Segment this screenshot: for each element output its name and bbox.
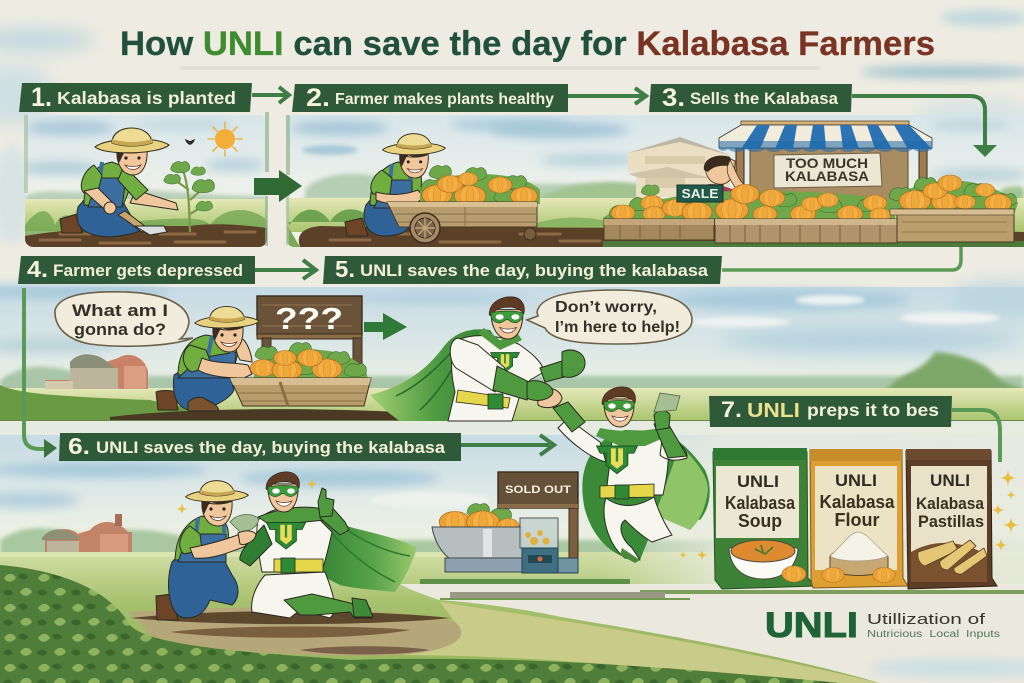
panel: step 6 scene: [0, 421, 1024, 683]
arrow: 7 to bags: [952, 410, 1000, 462]
pumpkin piles: [603, 175, 1018, 222]
juicing machine and sold out sign: [432, 472, 578, 573]
sale sign: [677, 185, 723, 202]
speech bubble: don't worry: [527, 290, 692, 344]
arrow: towards hero: [364, 313, 407, 340]
label 4: 4.: [27, 256, 48, 282]
title: How UNLI can save the day for Kalabasa Farmers: [120, 25, 935, 63]
panel: step 4 and 5 scene: [0, 282, 1024, 422]
product bag: pastillas: [906, 449, 997, 589]
flow arrows: [24, 87, 1000, 462]
crates: [604, 209, 1014, 243]
road and lower right fields: [400, 579, 1024, 683]
product bag: flour: Flour: [834, 510, 880, 530]
speech bubble: what am I gonna do: [55, 292, 193, 346]
crate of pumpkins: [230, 343, 371, 406]
speech bubble: what am I gonna do: What am I: [72, 301, 168, 320]
label 2: [292, 84, 568, 112]
background clouds top: [0, 10, 1024, 318]
label 5: [323, 256, 722, 284]
label 4: [18, 256, 255, 284]
sign: too much kalabasa: [774, 153, 882, 188]
logo: UNLI wordmark: Utillization of: [867, 611, 986, 628]
label 1: Kalabasa is planted: [57, 88, 236, 108]
label 1: 1.: [31, 82, 52, 112]
speech bubble: don't worry: I’m here to help!: [555, 319, 680, 336]
arrow: 2 to 3: [568, 88, 646, 104]
icon: bird: [185, 139, 195, 145]
product bag: soup: [713, 448, 815, 589]
label 2: Farmer makes plants healthy: [335, 91, 554, 108]
label 7: [709, 396, 952, 427]
building behind stall: [628, 137, 730, 197]
logo: UNLI wordmark: Nutricious Local Inputs: [867, 629, 1000, 640]
hero flying with clasp: [537, 387, 710, 563]
logo: UNLI wordmark: UNLI: [765, 606, 858, 645]
hero kneeling: [230, 472, 417, 618]
label 3: Sells the Kalabasa: [690, 89, 839, 108]
sparkles by bags: [679, 470, 1019, 561]
arrow: 3 to 4: [852, 96, 997, 157]
sparkles near farmer: [176, 478, 318, 515]
panel: step 2 and 3 scene: [287, 115, 1024, 247]
label 4: Farmer gets depressed: [53, 262, 243, 280]
farmhouse: [42, 514, 132, 553]
icon: sun: [208, 122, 242, 156]
question mark sign: ???: [275, 301, 343, 336]
farmer with money: [156, 481, 248, 620]
question mark sign: [257, 296, 362, 372]
icon: soup bowl: [729, 540, 806, 582]
label 5: UNLI saves the day, buying the kalabasa: [360, 261, 709, 280]
juicing machine and sold out sign: SOLD OUT: [505, 484, 571, 496]
product bag: pastillas: Pastillas: [918, 512, 984, 531]
product bag: flour: UNLI: [835, 471, 877, 490]
icon: flour bowl: [822, 532, 895, 582]
sign: too much kalabasa: TOO MUCH: [786, 156, 868, 171]
decorative panel edges: [24, 112, 290, 246]
arrow: 4 to 5: [255, 260, 316, 279]
label 6: [59, 433, 461, 461]
label 1: [19, 82, 252, 112]
farmer planting: [60, 128, 178, 237]
arrow: 4 to 6: [24, 288, 57, 458]
speech bubble: don't worry: Don’t worry,: [555, 299, 657, 316]
farmhouse: [45, 354, 148, 389]
bottom grass: [0, 565, 880, 683]
hero standing: [370, 297, 585, 421]
arrow: 3 to 5 connector: [722, 247, 961, 270]
product bag: flour: [810, 449, 908, 588]
product bag: soup: Kalabasa: [725, 493, 796, 513]
label 6: UNLI saves the day, buying the kalabasa: [96, 438, 446, 457]
vendor: [704, 156, 745, 192]
arrow: 1 to 2: [252, 87, 289, 103]
arrow: step 1 scene to step 2 scene: [254, 170, 302, 202]
farmer with cart: [345, 134, 445, 236]
cart of pumpkins: [387, 166, 540, 243]
sign: too much kalabasa: KALABASA: [785, 169, 869, 184]
product bag: soup: UNLI: [737, 472, 779, 491]
product bag: pastillas: Kalabasa: [916, 494, 984, 513]
logo: UNLI wordmark: [765, 606, 1000, 645]
product bag: pastillas: UNLI: [930, 471, 970, 490]
label 5: 5.: [335, 256, 355, 282]
market stall: [603, 121, 1018, 243]
farmer depressed: [156, 306, 259, 411]
label 3: 3.: [662, 84, 685, 112]
product bag: flour: Kalabasa: [820, 492, 895, 512]
arrow: 6 to machine: [461, 435, 554, 455]
label 7: 7.: [721, 397, 742, 422]
icon: pastillas: [918, 540, 987, 574]
icon: seedling: [164, 162, 214, 232]
money: [230, 515, 258, 532]
product bag: soup: Soup: [738, 511, 782, 531]
label 6: 6.: [68, 433, 90, 459]
label 2: 2.: [306, 84, 330, 112]
panel: step 1 scene: [20, 115, 267, 247]
label 7: UNLI: [747, 400, 800, 422]
label 3: [649, 84, 852, 112]
label 7: preps it to bes: [807, 400, 939, 420]
speech bubble: what am I gonna do: gonna do?: [74, 320, 166, 339]
sale sign: SALE: [682, 187, 718, 201]
